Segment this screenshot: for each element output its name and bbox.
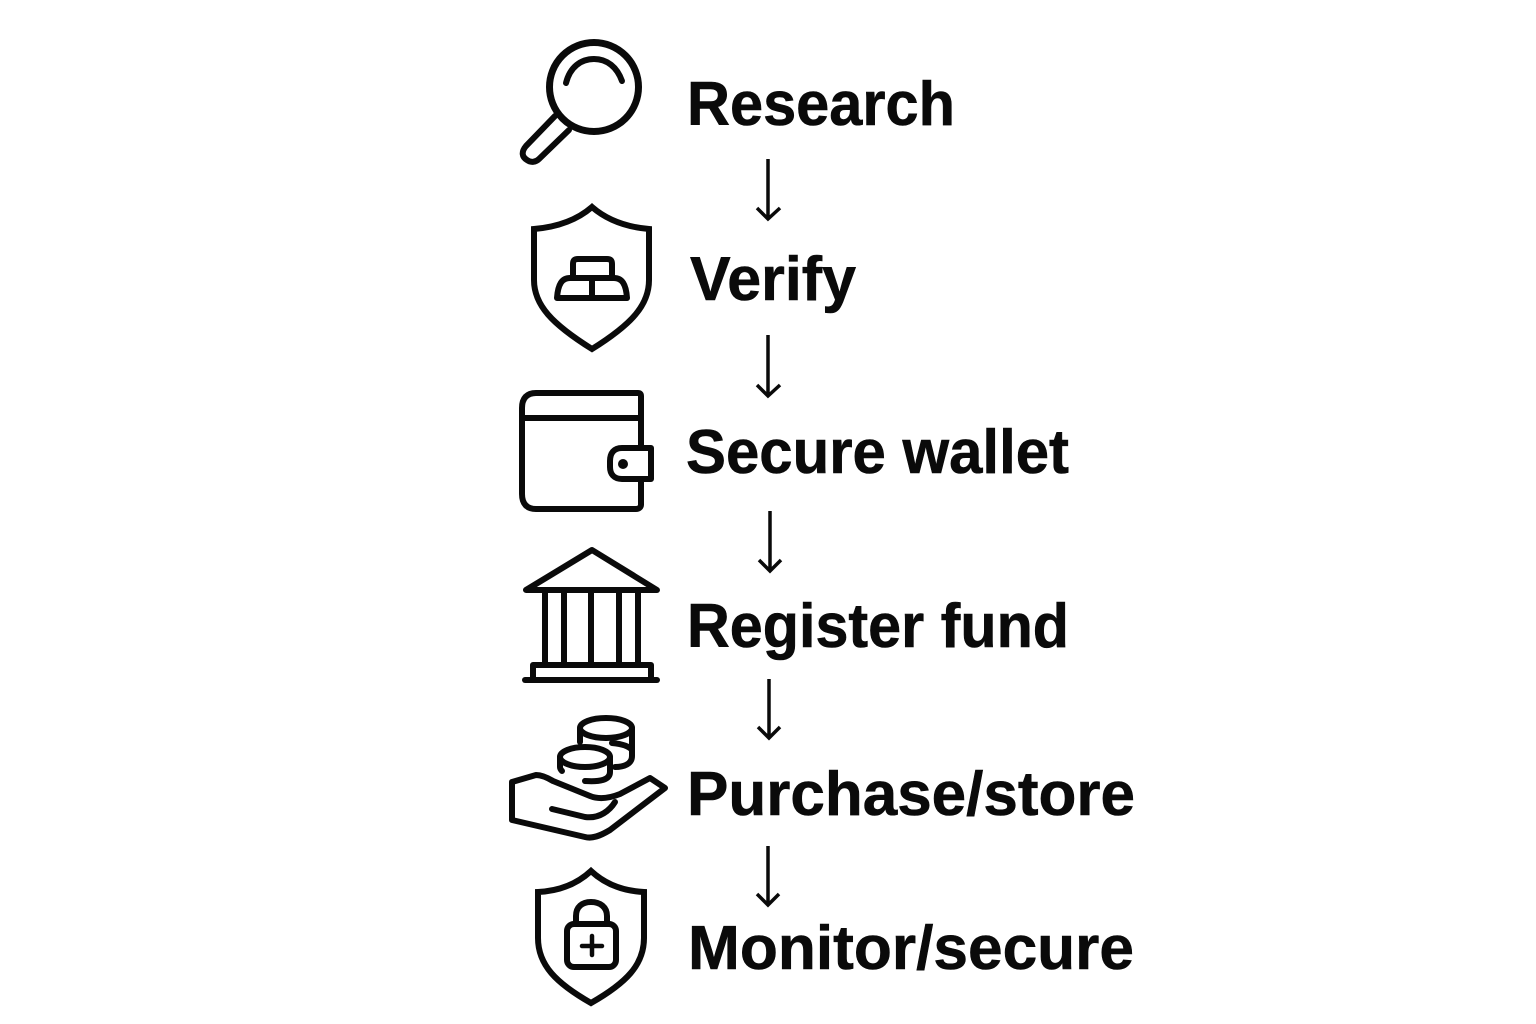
icon: shield with padlock	[538, 871, 644, 1003]
arrow: Register fund to Purchase/store	[758, 679, 780, 738]
label: Secure wallet: Secure wallet	[686, 418, 1069, 487]
label: Monitor/secure: Monitor/secure	[688, 914, 1134, 983]
icon: shield with gold bars	[534, 207, 649, 349]
arrow: Verify to Secure wallet	[757, 335, 780, 396]
arrow: Purchase/store to Monitor/secure	[757, 846, 779, 905]
icon: bank building	[525, 550, 657, 680]
arrow: Secure wallet to Register fund	[759, 511, 781, 571]
label: Research: Research	[687, 70, 955, 139]
label: Register fund: Register fund	[687, 592, 1069, 661]
label: Verify: Verify	[690, 245, 856, 314]
icon: wallet	[522, 393, 651, 509]
label: Purchase/store: Purchase/store	[687, 760, 1135, 829]
icon: magnifying glass	[523, 42, 638, 162]
arrow: Research to Verify	[757, 159, 780, 219]
icon: hand holding coins	[512, 718, 665, 838]
